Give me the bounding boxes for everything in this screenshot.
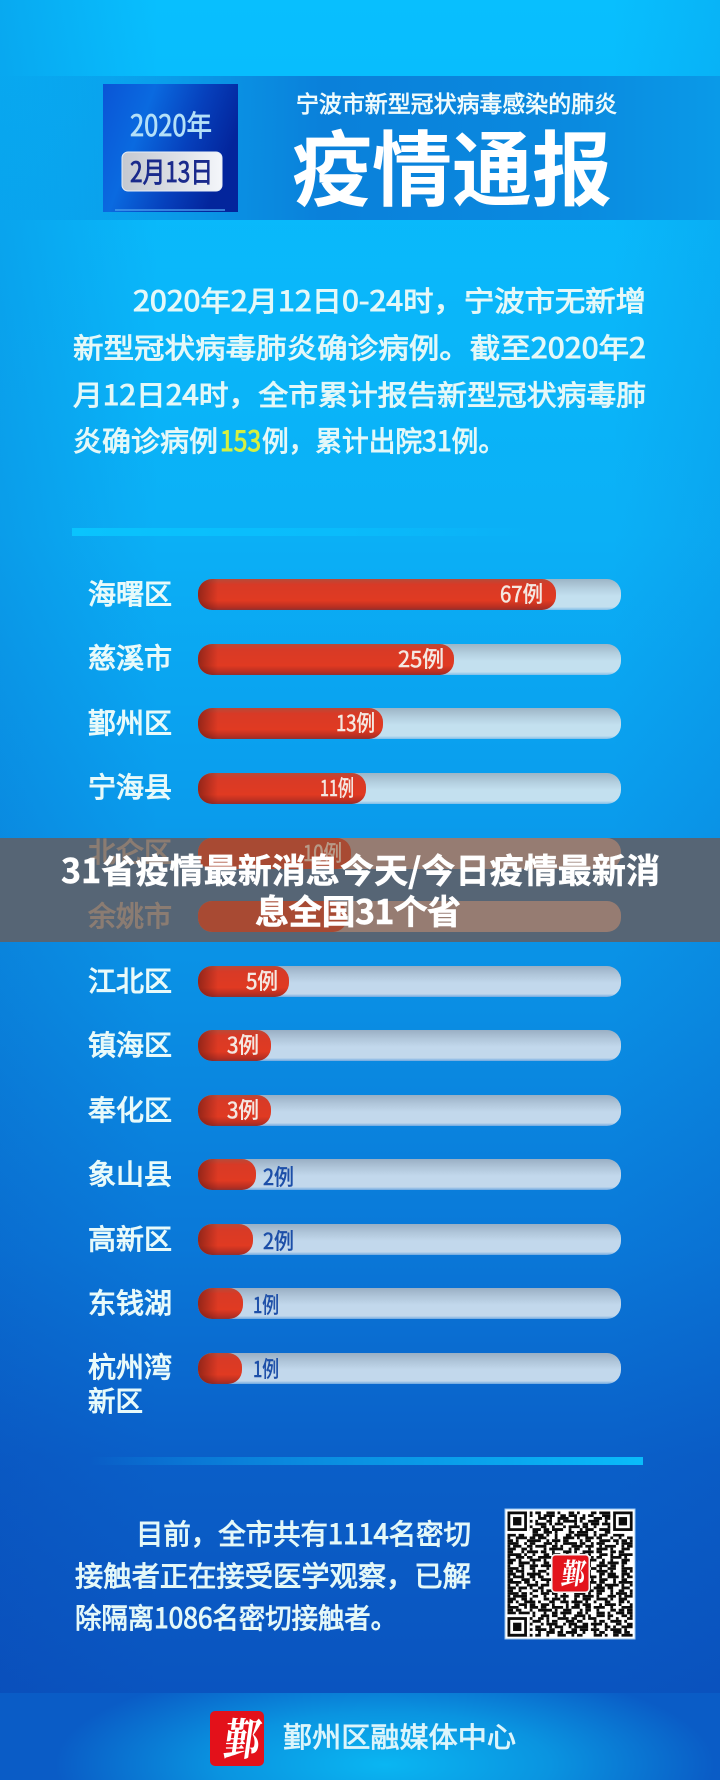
- date pill: 2月13日: [130, 151, 213, 191]
- QR finder: bottom-left: [508, 1614, 530, 1637]
- contact note paragraph: 目前，全市共有1114名密切: [136, 1513, 471, 1553]
- year text: 2020年: [130, 103, 212, 145]
- footer logo: 鄞: [220, 1704, 266, 1768]
- header band: [0, 76, 720, 223]
- highlighted number: 153: [220, 420, 261, 460]
- caption title: 31省疫情最新消息今天/今日疫情最新消: [61, 844, 660, 893]
- row: 海曙区 67例: [88, 573, 621, 613]
- intro paragraph: 炎确诊病例: [73, 420, 218, 460]
- obscured row: 北仑区 10例: [88, 831, 621, 871]
- row: 镇海区 3例: 3例: [227, 1028, 259, 1060]
- footer band: [0, 1693, 720, 1780]
- row: 海曙区 67例: 海曙区: [88, 573, 172, 613]
- obscured row: 北仑区 10例: 北仑区: [88, 831, 172, 871]
- row: 慈溪市 25例: 25例: [398, 642, 444, 674]
- intro paragraph: 月12日24时，全市累计报告新型冠状病毒肺: [73, 374, 646, 414]
- row: 东钱湖 1例: 东钱湖: [88, 1282, 172, 1322]
- row: 慈溪市 25例: [88, 637, 621, 677]
- bar chart: district cases: [88, 573, 621, 1420]
- subtitle: 宁波市新型冠状病毒感染的肺炎: [296, 85, 617, 119]
- overlay caption band: [0, 831, 720, 942]
- caption title: 息全国31个省: [255, 885, 461, 934]
- QR finder: top-right: [610, 1512, 633, 1534]
- contact note paragraph: 接触者正在接受医学观察，已解: [75, 1555, 471, 1595]
- intro paragraph: 2020年2月12日0-24时，宁波市无新增: [133, 280, 646, 320]
- obscured row: 北仑区 10例: 10例: [303, 836, 342, 868]
- footer organisation name: 鄞州区融媒体中心: [283, 1716, 516, 1756]
- row: 象山县 2例: [88, 1153, 621, 1193]
- divider top: [72, 528, 532, 536]
- row: 象山县 2例: 2例: [263, 1160, 294, 1192]
- row: 鄞州区 13例: 13例: [336, 706, 375, 738]
- row: 宁海县 11例: [88, 766, 621, 806]
- caption title: [61, 844, 660, 934]
- row: 高新区 2例: [88, 1218, 621, 1258]
- row: 高新区 2例: 2例: [263, 1224, 294, 1256]
- row: 东钱湖 1例: 1例: [253, 1288, 279, 1320]
- row: 江北区 5例: 5例: [246, 964, 278, 996]
- row: 奉化区 3例: 3例: [227, 1093, 259, 1125]
- row: 江北区 5例: 江北区: [88, 960, 172, 1000]
- QR finder: top-left: [508, 1512, 530, 1534]
- row: 高新区 2例: 高新区: [88, 1218, 172, 1258]
- contact note paragraph: [75, 1513, 471, 1637]
- row: 镇海区 3例: 镇海区: [88, 1024, 172, 1064]
- row: 杭州湾新区 1例: 新区: [88, 1380, 143, 1420]
- row: 象山县 2例: 象山县: [88, 1153, 172, 1193]
- row: 宁海县 11例: 11例: [320, 771, 354, 803]
- row: 杭州湾新区 1例: [88, 1346, 621, 1420]
- intro paragraph: [73, 280, 646, 460]
- obscured row: 余姚市: [88, 895, 621, 935]
- date box: [103, 84, 238, 212]
- divider bottom: [90, 1457, 643, 1465]
- row: 东钱湖 1例: [88, 1282, 621, 1322]
- row: 江北区 5例: [88, 960, 621, 1000]
- row: 鄞州区 13例: 鄞州区: [88, 702, 172, 742]
- intro paragraph: 例，累计出院31例。: [262, 420, 505, 460]
- row: 宁海县 11例: 宁海县: [88, 766, 172, 806]
- row: 慈溪市 25例: 慈溪市: [88, 637, 172, 677]
- row: 镇海区 3例: [88, 1024, 621, 1064]
- QR centre logo: 鄞: [559, 1550, 589, 1593]
- row: 奉化区 3例: [88, 1089, 621, 1129]
- main title: 疫情通报: [292, 104, 612, 223]
- contact note paragraph: 除隔离1086名密切接触者。: [75, 1597, 397, 1637]
- intro paragraph: 新型冠状病毒肺炎确诊病例。截至2020年2: [73, 327, 646, 367]
- obscured row: 余姚市: 余姚市: [88, 895, 172, 935]
- row: 鄞州区 13例: [88, 702, 621, 742]
- row: 海曙区 67例: 67例: [500, 577, 543, 609]
- QR code: [505, 1509, 635, 1639]
- row: 杭州湾新区 1例: 杭州湾: [88, 1346, 172, 1386]
- row: 奉化区 3例: 奉化区: [88, 1089, 172, 1129]
- row: 杭州湾新区 1例: 1例: [253, 1352, 279, 1384]
